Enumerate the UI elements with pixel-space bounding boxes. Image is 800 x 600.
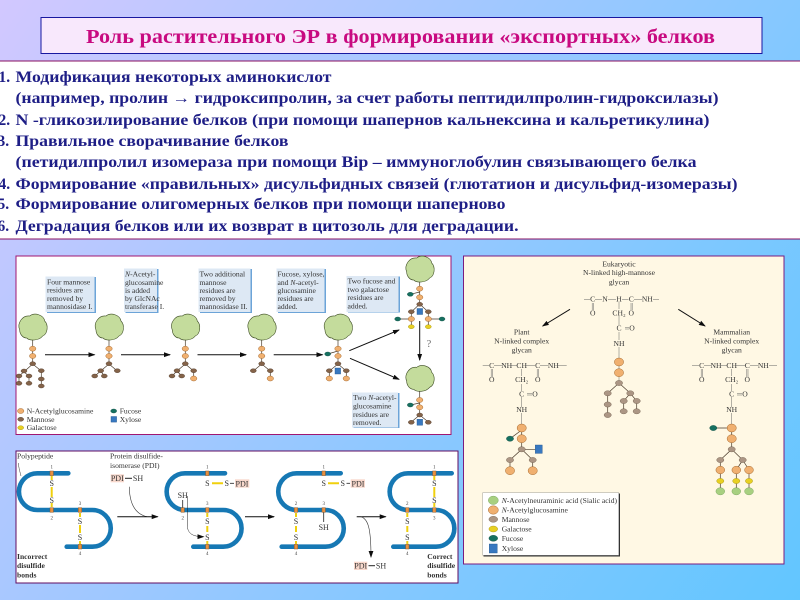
label: correct disulfide bonds: Correct bbox=[427, 552, 453, 561]
heading: eukaryotic glycan: Eukaryotic bbox=[602, 260, 636, 268]
central chemical backbone: N bbox=[602, 294, 608, 304]
polypeptide state 2: PDI bbox=[236, 480, 249, 488]
reaction arrow 2 bbox=[245, 516, 274, 518]
glycan tree 3 bbox=[169, 314, 200, 381]
arrow to mammalian glycan bbox=[678, 309, 705, 326]
callout: step 2 bbox=[124, 268, 164, 313]
central chemical backbone bbox=[584, 294, 659, 383]
legend: Xylose bbox=[120, 415, 142, 424]
legend: N-Acetylglucosamine bbox=[27, 406, 94, 416]
text panel: list of functions: Формирование «правильных» дисульфидных связей (глютатион и дисульфид-изомеразы) bbox=[16, 176, 738, 193]
question mark: ? bbox=[427, 339, 432, 350]
legend box: Fucose bbox=[502, 534, 524, 543]
callout: step 2: is added bbox=[125, 286, 150, 295]
heading: eukaryotic glycan: N-linked high-mannose bbox=[583, 268, 656, 277]
polypeptide state 1 bbox=[19, 466, 111, 557]
label: polypeptide: Polypeptide bbox=[17, 452, 54, 460]
callout: step 5b: removed. bbox=[353, 418, 382, 427]
callout: step 5b: residues are bbox=[353, 410, 390, 419]
polypeptide state 1: 4 bbox=[79, 552, 82, 557]
polypeptide state 2: S bbox=[224, 479, 229, 488]
text panel: list of functions: Формирование олигомерных белков при помощи шаперново bbox=[16, 196, 506, 213]
panel: glycan types bbox=[464, 256, 784, 564]
text panel: list of functions bbox=[0, 61, 800, 239]
polypeptide state 2: 2 bbox=[181, 516, 184, 522]
plant chemical backbone: C bbox=[519, 390, 524, 398]
central chemical backbone: C bbox=[629, 294, 634, 304]
polypeptide state 1: 3 bbox=[79, 502, 82, 507]
polypeptide state 2: 1 bbox=[206, 466, 209, 470]
mammalian chemical backbone: C bbox=[699, 361, 704, 370]
plant chemical backbone: O bbox=[532, 390, 538, 398]
PDI-SH reagent: PDI bbox=[111, 474, 124, 483]
heading: mammalian glycan: Mammalian bbox=[713, 328, 750, 336]
arrow 3 bbox=[198, 354, 246, 356]
label: protein disulfide isomerase: Protein disulfide- bbox=[110, 452, 163, 460]
glycan tree 5 bbox=[324, 314, 352, 381]
callout: step 5b: glucosamine bbox=[353, 402, 392, 410]
polypeptide state 4 bbox=[390, 466, 454, 557]
label: incorrect disulfide bonds: bonds bbox=[17, 570, 36, 580]
legend: Mannose bbox=[27, 415, 55, 424]
polypeptide state 3: 4 bbox=[295, 552, 298, 557]
callout: step 2: glucosamine bbox=[125, 278, 164, 287]
label: incorrect disulfide bonds: Incorrect bbox=[17, 552, 48, 561]
polypeptide state 3: 2 bbox=[295, 502, 298, 507]
label: protein disulfide isomerase: isomerase (PDI) bbox=[110, 461, 160, 470]
heading: eukaryotic glycan: glycan bbox=[609, 278, 629, 286]
callout: step 1 bbox=[46, 276, 96, 313]
PDI-SH reagent: SH bbox=[133, 474, 143, 483]
released PDI-SH: PDI bbox=[354, 562, 367, 570]
callout: step 5a bbox=[346, 276, 400, 312]
text panel: list of functions: (петидилпролил изомераза при помощи Bip – иммуноглобулин связывающего белка bbox=[16, 154, 697, 171]
callout: step 1: mannosidase I. bbox=[47, 302, 93, 311]
callout: step 3: Two additional bbox=[200, 270, 245, 278]
plant chemical backbone: CH₂ bbox=[515, 375, 529, 384]
plant chemical backbone: O bbox=[489, 375, 495, 384]
released PDI-SH: SH bbox=[376, 562, 386, 570]
callout: step 4: Fucose, xylose, bbox=[278, 270, 325, 278]
callout: step 5a: two galactose bbox=[348, 285, 390, 294]
polypeptide state 3: S bbox=[294, 533, 298, 542]
polypeptide state 4: 2 bbox=[406, 502, 409, 507]
mammalian chemical backbone: NH bbox=[758, 361, 769, 370]
callout: step 3: mannosidase II. bbox=[200, 302, 248, 311]
polypeptide state 2: 4 bbox=[206, 552, 209, 557]
label: polypeptide bbox=[17, 452, 54, 476]
polypeptide state 1: S bbox=[49, 496, 54, 505]
central chemical backbone: O bbox=[590, 308, 596, 318]
curved arrow from PDI bbox=[129, 487, 147, 517]
mammalian chemical backbone: C bbox=[729, 390, 734, 398]
legend box: Xylose bbox=[502, 544, 524, 553]
callout: step 3 bbox=[198, 268, 252, 313]
legend bbox=[18, 406, 142, 432]
callout: step 4: and N-acetyl- bbox=[278, 278, 319, 287]
curved arrow releasing PDI bbox=[361, 517, 371, 557]
callout: step 5a: added. bbox=[348, 302, 368, 310]
PDI-SH reagent bbox=[111, 474, 143, 483]
mammalian chemical backbone: NH bbox=[726, 405, 738, 414]
legend box: N-Acetylneuraminic acid (Sialic acid) bbox=[501, 496, 618, 505]
polypeptide state 1: S bbox=[78, 517, 82, 526]
mammalian chemical backbone: O bbox=[742, 390, 748, 398]
legend box: N-Acetylglucosamine bbox=[501, 506, 569, 515]
callout: step 4: added. bbox=[278, 302, 298, 311]
polypeptide state 2: SH bbox=[178, 491, 188, 500]
callout: step 1: residues are bbox=[47, 286, 84, 294]
mammalian chemical backbone: NH bbox=[711, 361, 722, 370]
polypeptide state 4: S bbox=[405, 533, 410, 542]
central chemical backbone: O bbox=[629, 308, 635, 318]
polypeptide state 4: 3 bbox=[433, 516, 436, 522]
text panel: list of functions: N -гликозилирование белков (при помощи шапернов кальнексина и кальретикулина) bbox=[16, 112, 710, 129]
polypeptide state 3: S bbox=[321, 479, 326, 488]
callout: step 4 bbox=[276, 268, 326, 313]
polypeptide state 1: 2 bbox=[50, 516, 53, 522]
reaction arrow 1 bbox=[117, 516, 158, 518]
mammalian chemical backbone: O bbox=[745, 375, 751, 384]
polypeptide state 3: 3 bbox=[322, 502, 325, 507]
high-mannose glycan bbox=[604, 358, 640, 418]
plant chemical backbone: C bbox=[489, 361, 494, 370]
heading: plant glycan: glycan bbox=[512, 346, 532, 354]
heading: mammalian glycan: N-linked complex bbox=[704, 336, 759, 346]
plant chemical backbone: NH bbox=[548, 361, 559, 370]
arrow to plant glycan bbox=[543, 309, 570, 326]
callout: step 1: removed by bbox=[47, 294, 83, 303]
polypeptide state 4: 1 bbox=[433, 466, 436, 470]
callout: step 5a: residues are bbox=[348, 293, 384, 302]
arrow up to upper glycan bbox=[349, 330, 399, 351]
text panel: list of functions: Модификация некоторых аминокислот bbox=[16, 69, 332, 86]
mammalian complex glycan bbox=[710, 424, 753, 495]
title box bbox=[41, 18, 762, 54]
callout: step 2: N-Acetyl- bbox=[125, 270, 155, 278]
reaction arrow 3 bbox=[357, 516, 386, 518]
polypeptide state 2: S bbox=[205, 517, 210, 526]
heading: mammalian glycan: glycan bbox=[722, 346, 742, 354]
title: Роль растительного ЭР в формировании «экспортных» белков bbox=[86, 26, 715, 48]
central chemical backbone: CH₂ bbox=[612, 308, 626, 318]
callout: step 2: transferase I. bbox=[125, 302, 164, 311]
mammalian chemical backbone: C bbox=[745, 361, 750, 370]
glycan tree 7 bbox=[406, 365, 434, 425]
polypeptide state 1: 1 bbox=[50, 466, 53, 470]
text panel: list of functions: Правильное сворачивание белков bbox=[16, 133, 288, 150]
arrow 2 bbox=[121, 354, 170, 356]
plant chemical backbone: C bbox=[535, 361, 540, 370]
central chemical backbone: NH bbox=[642, 294, 653, 304]
central chemical backbone: H bbox=[616, 294, 622, 304]
polypeptide state 2: S bbox=[205, 533, 210, 542]
polypeptide state 4: 4 bbox=[406, 552, 409, 557]
polypeptide state 4: S bbox=[432, 496, 437, 505]
legend: Galactose bbox=[27, 423, 57, 432]
callout: step 4: glucosamine bbox=[278, 286, 317, 295]
polypeptide state 4: S bbox=[432, 479, 437, 488]
callout: step 5a: Two fucose and bbox=[348, 276, 396, 286]
central chemical backbone: NH bbox=[614, 339, 625, 348]
heading: plant glycan: Plant bbox=[514, 328, 530, 336]
legend box: Mannose bbox=[502, 515, 530, 524]
legend box bbox=[483, 493, 620, 556]
plant chemical backbone bbox=[483, 361, 567, 428]
callout: step 4: residues are bbox=[278, 294, 314, 303]
glycan tree 1 bbox=[16, 314, 47, 388]
polypeptide state 4: S bbox=[405, 517, 410, 526]
callout: step 3: residues are bbox=[200, 286, 236, 295]
mammalian chemical backbone: CH bbox=[726, 361, 737, 370]
mammalian chemical backbone: O bbox=[699, 375, 705, 384]
callout: step 1: Four mannose bbox=[47, 278, 91, 286]
mammalian chemical backbone bbox=[692, 361, 777, 428]
polypeptide state 3 bbox=[278, 466, 365, 557]
callout: step 2: by GlcNAc bbox=[125, 294, 160, 303]
central chemical backbone: C bbox=[616, 324, 622, 332]
glycan tree 2 bbox=[92, 314, 123, 378]
arrow down to lower glycan bbox=[350, 358, 399, 379]
plant chemical backbone: NH bbox=[516, 405, 528, 414]
legend: Fucose bbox=[120, 406, 142, 416]
plant chemical backbone: CH bbox=[516, 361, 527, 370]
callout: step 3: mannose bbox=[200, 278, 227, 287]
polypeptide state 3: S bbox=[294, 517, 298, 526]
text panel: list of functions: (например, пролин → гидроксипролин, за счет работы пептидилпролин-гидроксилазы) bbox=[16, 90, 718, 107]
polypeptide state 3: 1 bbox=[322, 466, 325, 470]
callout: step 3: removed by bbox=[200, 294, 236, 303]
polypeptide state 3: S bbox=[340, 479, 345, 488]
polypeptide state 3: PDI bbox=[352, 480, 365, 488]
panel: disulfide bond isomerization bbox=[16, 451, 458, 583]
plant chemical backbone: NH bbox=[501, 361, 513, 370]
label: correct disulfide bonds: bonds bbox=[427, 570, 447, 580]
text panel: list of functions: Деградация белков или их возврат в цитозоль для деградации. bbox=[16, 218, 519, 235]
vertical arrow bbox=[419, 321, 421, 360]
released PDI-SH bbox=[354, 562, 386, 570]
polypeptide state 2: S bbox=[205, 479, 210, 488]
polypeptide state 3: SH bbox=[319, 523, 329, 532]
label: correct disulfide bonds: disulfide bbox=[427, 561, 456, 570]
glycan tree 6 bbox=[395, 256, 445, 329]
polypeptide state 1: S bbox=[78, 533, 82, 542]
mammalian chemical backbone: CH₂ bbox=[725, 375, 739, 384]
arrow 4 bbox=[274, 354, 322, 356]
glycan tree 4 bbox=[248, 314, 276, 381]
panel: N-glycan processing pathway bbox=[16, 256, 451, 434]
arrow 1 bbox=[45, 354, 94, 356]
central chemical backbone: C bbox=[590, 294, 595, 304]
central chemical backbone: O bbox=[629, 324, 635, 332]
plant complex glycan bbox=[505, 424, 542, 475]
polypeptide state 2: 3 bbox=[206, 502, 209, 507]
legend box: Galactose bbox=[502, 525, 532, 534]
callout: step 5b bbox=[352, 392, 400, 428]
callout: step 5b: Two N-acetyl- bbox=[353, 393, 397, 402]
heading: plant glycan: N-linked complex bbox=[494, 336, 549, 346]
label: incorrect disulfide bonds: disulfide bbox=[17, 561, 45, 570]
polypeptide state 2 bbox=[167, 466, 249, 557]
plant chemical backbone: O bbox=[535, 375, 541, 384]
polypeptide state 1: S bbox=[49, 479, 54, 488]
